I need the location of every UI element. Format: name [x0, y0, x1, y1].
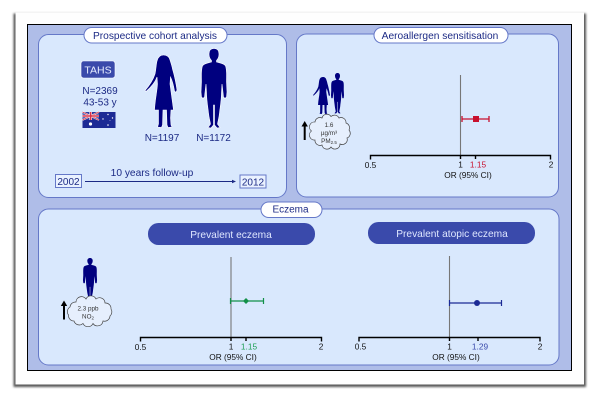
forest plot: aeroallergen sensitisation: 0.5 [365, 160, 377, 170]
forest plot: aeroallergen sensitisation: OR (95% CI) [444, 170, 492, 180]
study sample text [82, 86, 118, 108]
cloud: NO2 exposure: 2.3 ppb [77, 306, 99, 312]
confidence interval marker [230, 298, 264, 304]
forest plot: prevalent eczema: 1 [229, 342, 234, 352]
forest plot: aeroallergen sensitisation: 1.15 [470, 160, 486, 170]
forest plot: prevalent atopic eczema: 1 [447, 342, 452, 352]
cloud: NO2 exposure: NO [82, 314, 91, 320]
forest plot: prevalent eczema: 1.15 [241, 342, 257, 352]
forest plot: prevalent atopic eczema: 2 [538, 342, 543, 352]
heading: prospective cohort analysis [84, 28, 227, 43]
subheading: prevalent eczema: Prevalent eczema [190, 230, 272, 241]
forest plot: prevalent eczema: OR (95% CI) [209, 352, 257, 362]
forest plot: aeroallergen sensitisation [365, 75, 554, 180]
forest plot: aeroallergen sensitisation: 2 [549, 160, 554, 170]
cloud: PM2.5 exposure [309, 114, 350, 149]
women count: N=1197 [145, 133, 180, 144]
forest plot: prevalent atopic eczema: 1.29 [472, 342, 488, 352]
men count: N=1172 [196, 133, 231, 144]
subheading: prevalent eczema [148, 223, 315, 245]
TAHS badge: TAHS [84, 64, 112, 76]
forest plot: prevalent atopic eczema [355, 256, 543, 362]
cloud: PM2.5 exposure: PM [321, 138, 331, 145]
panel: aeroallergen sensitisation [296, 28, 558, 197]
cloud: PM2.5 exposure: 2.5 [331, 140, 337, 145]
forest plot: prevalent atopic eczema: 0.5 [355, 342, 367, 352]
heading: eczema [261, 202, 322, 218]
icon: man silhouette [83, 258, 97, 299]
cloud: PM2.5 exposure: 1.6 [325, 122, 334, 129]
forest plot: prevalent eczema: 2 [319, 342, 324, 352]
forest plot: prevalent eczema: 0.5 [135, 342, 147, 352]
end year [240, 175, 266, 188]
arrow: increase in NO2 [61, 300, 67, 320]
heading: prospective cohort analysis: Prospective cohort analysis [93, 31, 217, 42]
end year: 2012 [242, 178, 265, 188]
cloud: PM2.5 exposure: µg/m³ [321, 130, 337, 137]
confidence interval marker [450, 300, 502, 306]
panel: prospective cohort analysis [38, 28, 286, 198]
start year [56, 174, 82, 188]
icon: couple silhouettes [313, 73, 344, 114]
study sample text: 43-53 y [83, 98, 117, 108]
forest plot: prevalent eczema [135, 257, 324, 362]
icon: woman silhouette [145, 55, 177, 128]
follow-up label: 10 years follow-up [111, 168, 194, 179]
arrow: follow-up timeline [85, 180, 236, 183]
subheading: prevalent atopic eczema: Prevalent atopic eczema [396, 229, 508, 240]
cloud: NO2 exposure: 2 [91, 316, 94, 320]
icon: man silhouette [201, 48, 227, 128]
heading: eczema: Eczema [272, 204, 309, 216]
forest plot: prevalent atopic eczema: OR (95% CI) [432, 352, 480, 362]
cloud: NO2 exposure [67, 296, 112, 327]
outer blue background [28, 24, 572, 370]
confidence interval marker [462, 116, 489, 122]
panel: eczema [38, 202, 559, 365]
subheading: prevalent atopic eczema [368, 222, 535, 244]
arrow: increase in PM2.5 [302, 121, 308, 140]
start year: 2002 [57, 177, 80, 188]
TAHS badge [81, 61, 115, 78]
heading: aeroallergen sensitisation: Aeroallergen sensitisation [382, 31, 498, 42]
forest plot: aeroallergen sensitisation: 1 [458, 160, 463, 170]
study sample text: N=2369 [82, 86, 118, 97]
icon: Australian flag [82, 112, 116, 128]
heading: aeroallergen sensitisation [374, 28, 508, 43]
